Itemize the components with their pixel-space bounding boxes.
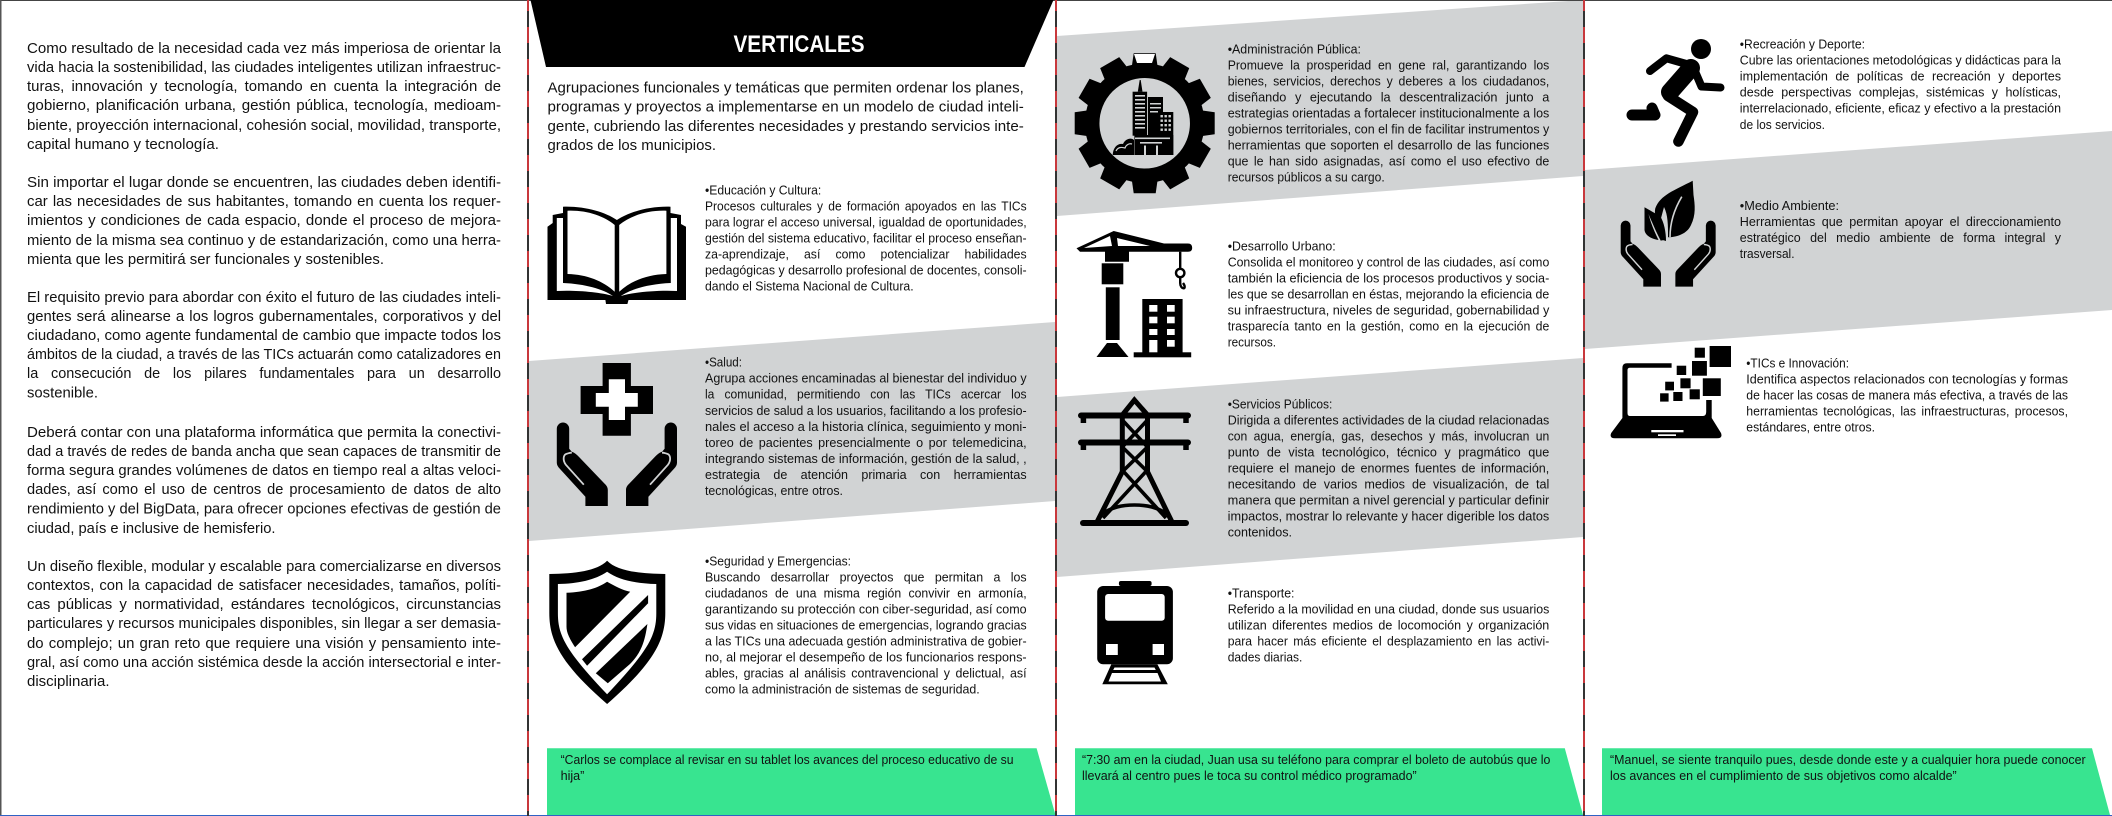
heading banner: VERTICALES: VERTICALES	[734, 31, 864, 58]
text block: Medio Ambiente: •Medio Ambiente:	[1740, 199, 1839, 213]
panel: intro text column: biente, proyección internacional, cohesión social, movilidad, transporte,	[27, 117, 501, 134]
panel: intro text column	[27, 40, 502, 690]
text block: Servicios Públicos: contenidos.	[1228, 525, 1292, 539]
callout: Carlos quote: “Carlos se complace al revisar en su tablet los avances del proceso educativo de su	[561, 753, 1014, 767]
text block: Recreación y Deporte	[1740, 38, 2061, 132]
panel: intro text column: capital humano y tecnología.	[27, 136, 219, 153]
text block: Salud: tecnológicas, entre otros.	[705, 484, 843, 498]
text block: Salud: la comunidad, permitiendo con las TICs acercar los	[705, 388, 1027, 402]
text block: Recreación y Deporte: implementación de políticas de recreación y deportes	[1740, 70, 2061, 84]
text block: Educación y Cultura: Procesos culturales y de formación apoyados en las TICs	[705, 200, 1027, 214]
panel: intro text column: vida hacia la sostenibilidad, las ciudades inteligentes utilizan infraestruc-	[27, 59, 501, 76]
panel: intro text column: dades, así como el uso de centros de procesamiento de datos de alto	[27, 481, 501, 498]
text block: Salud: toreo de pacientes presencialmente o por telemedicina,	[705, 436, 1027, 450]
callout: Carlos quote: hija”	[561, 769, 584, 783]
panel: intro text column: ciudad, país e inclusive de hemisferio.	[27, 520, 276, 537]
text block: Seguridad y Emergencias: ables, gracias al análisis contravencional y delictual, así	[705, 667, 1027, 681]
text block: Educación y Cultura: pedagógicas y desarrollo profesional de docentes, consoli-	[705, 264, 1027, 278]
panel: intro text column: particulares y recursos municipales disponibles, sin llegar a ser demasia-	[27, 615, 501, 632]
text block: Educación y Cultura: za-aprendizaje, así como potencializar habilidades	[705, 248, 1027, 262]
icon: gear with city buildings	[1075, 53, 1215, 193]
text block: Seguridad y Emergencias: a las TICs una adecuada gestión administrativa de gobier-	[705, 635, 1027, 649]
callout: Juan quote: llevará al centro pues le toca su control médico programado”	[1082, 769, 1417, 783]
icon: shield	[549, 561, 665, 704]
panel: intro text column: El requisito previo para abordar con éxito el futuro de las ciudades inteli-	[27, 289, 501, 306]
icon: running person	[1632, 39, 1720, 142]
text block: Seguridad y Emergencias: no, al mejorar el desempeño de los funcionarios respons-	[705, 651, 1027, 665]
text block: Servicios Públicos: punto de vista tecnológico, técnico y pragmático que	[1228, 445, 1549, 459]
icon: hands holding medical cross	[557, 363, 677, 506]
text block: Transporte: para hacer más eficiente el desplazamiento en las activi-	[1228, 634, 1549, 648]
gray band: Medio Ambiente	[1585, 131, 2112, 349]
panel: intro text column: contextos, con la capacidad de satisfacer necesidades, tamaños, políti-	[27, 577, 501, 594]
text block: Transporte: •Transporte:	[1228, 587, 1294, 601]
panel: intro text column: la consecución de los pilares fundamentales para un desarrollo	[27, 365, 501, 382]
callout: Manuel quote: los avances en el cumplimiento de sus objetivos como alcalde”	[1610, 769, 1957, 783]
panel: intro text column: rendimiento y del BigData, para ofrecer opciones efectivas de gestión de	[27, 500, 501, 518]
text block: Administración Pública	[1228, 42, 1550, 184]
text block: Administración Pública: Promueve la prosperidad en gene ral, garantizando los	[1228, 58, 1549, 72]
text block: TICs e Innovación	[1746, 357, 2068, 435]
text block: Administración Pública: recursos públicos a su cargo.	[1228, 170, 1385, 184]
text block: Salud: nales el acceso a la historia clínica, seguimiento y moni-	[705, 420, 1027, 434]
text block: Transporte: utilizan diferentes medios de locomoción y organización	[1228, 618, 1549, 632]
text block: Seguridad y Emergencias: como la administración de sistemas de seguridad.	[705, 683, 980, 697]
text block: Administración Pública: bienes, servicios, derechos y deberes a los ciudadanos,	[1228, 74, 1549, 88]
text block: Salud: Agrupa acciones encaminadas al bienestar del individuo y	[705, 372, 1027, 386]
text block: Servicios Públicos: Dirigida a diferentes actividades de la ciudad relacionadas	[1228, 413, 1549, 427]
text block: Recreación y Deporte: de los servicios.	[1740, 118, 1825, 132]
text block: Desarrollo Urbano: trasparecía tanto en la gestión, como en la ejecución de	[1228, 320, 1549, 334]
gray band: Servicios Públicos	[1057, 358, 1583, 577]
callout: Manuel quote	[1602, 748, 2110, 815]
text block: Transporte: dades diarias.	[1228, 650, 1302, 664]
intro paragraph: Agrupaciones funcionales: gente, cubriendo las diferentes necesidades y prestando servicios inte-	[548, 118, 1024, 135]
text block: TICs e Innovación: Identifica aspectos relacionados con tecnologías y formas	[1746, 373, 2068, 387]
text block: Administración Pública: diseñando y ejecutando la descentralización junto a	[1228, 90, 1549, 104]
text block: Recreación y Deporte: •Recreación y Deporte:	[1740, 38, 1865, 52]
icon: laptop with data squares	[1611, 346, 1731, 438]
panel: intro text column: sostenible.	[27, 384, 98, 402]
text block: Salud: estrategia de atención primaria con herramientas	[705, 468, 1027, 482]
heading banner: VERTICALES	[530, 0, 1054, 67]
text block: Administración Pública: •Administración Pública:	[1228, 42, 1361, 56]
intro paragraph: Agrupaciones funcionales	[548, 80, 1024, 154]
icon: open book	[548, 207, 686, 304]
text block: Medio Ambiente	[1740, 199, 2062, 261]
text block: Administración Pública: que le han sido asignadas, así como el uso efectivo de	[1228, 154, 1549, 168]
icon: hands holding leaves	[1621, 181, 1716, 287]
text block: Recreación y Deporte: Cubre las orientaciones metodológicas y didácticas para la	[1740, 54, 2061, 68]
text block: Administración Pública: gobiernos territoriales, con el fin de facilitar instrumentos y	[1228, 122, 1550, 136]
text block: Servicios Públicos: impactos, mostrar lo relevante y hacer digerible los datos	[1228, 509, 1549, 523]
text block: Medio Ambiente: estratégico del medio ambiente de forma integral y	[1740, 231, 2062, 245]
text block: Servicios Públicos: con agua, energía, gas, desechos y más, involucran un	[1228, 429, 1549, 443]
panel: intro text column: car las necesidades de sus habitantes, tomando en cuenta los requer-	[27, 193, 501, 210]
text block: Seguridad y Emergencias: ciudadanos de una misma región convivir en armonía,	[705, 587, 1027, 601]
gray band: Administración Pública	[1057, 0, 1583, 216]
text block: Desarrollo Urbano: también la eficiencia de los procesos productivos y socia-	[1228, 272, 1549, 286]
callout: Juan quote: “7:30 am en la ciudad, Juan usa su teléfono para comprar el boleto de autobús que lo	[1082, 753, 1550, 767]
intro paragraph: Agrupaciones funcionales: Agrupaciones funcionales y temáticas que permiten ordenar los planes,	[548, 80, 1024, 97]
text block: Administración Pública: estrategias orientadas a fortalecer institucionalmente a los	[1228, 106, 1549, 120]
text block: Administración Pública: herramientas que soporten el desarrollo de las funciones	[1228, 138, 1549, 152]
text block: Educación y Cultura: para lograr el acceso universal, igualdad de oportunidades,	[705, 216, 1027, 230]
text block: Seguridad y Emergencias: garantizando su protección con ciber-seguridad, así como	[705, 603, 1027, 617]
text block: Recreación y Deporte: desde perspectivas complejas, sistémicas y holísticas,	[1740, 86, 2061, 100]
panel: intro text column: mienta que les permitirá ser funcionales y sostenibles.	[27, 251, 384, 268]
text block: TICs e Innovación: estándares, entre otros.	[1746, 421, 1875, 435]
icon: electric transmission tower	[1081, 400, 1188, 523]
text block: Desarrollo Urbano: Consolida el monitoreo y control de las ciudades, así como	[1228, 256, 1549, 270]
intro paragraph: Agrupaciones funcionales: grados de los municipios.	[548, 137, 716, 154]
panel: intro text column: gral, así como una acción sistémica desde la acción intersectorial e inter-	[27, 654, 501, 671]
text block: TICs e Innovación: de hacer las cosas de manera más efectiva, a través de las	[1746, 389, 2068, 403]
text block: Salud: •Salud:	[705, 356, 742, 370]
intro paragraph: Agrupaciones funcionales: programas y proyectos a implementarse en un modelo de ciudad inteli-	[548, 99, 1024, 116]
text block: TICs e Innovación: •TICs e Innovación:	[1746, 357, 1849, 371]
text block: Salud	[705, 356, 1027, 498]
gray band: Salud	[529, 322, 1055, 541]
panel: intro text column: Como resultado de la necesidad cada vez más imperiosa de orientar la	[27, 40, 502, 57]
text block: Recreación y Deporte: interrelacionado, eficiente, eficaz y efectivo a la prestación	[1740, 102, 2061, 116]
icon: train	[1097, 581, 1173, 684]
text block: Educación y Cultura: gestión del sistema educativo, facilitar el proceso enseñan-	[705, 232, 1027, 246]
text block: Servicios Públicos: manera que permitan a nivel gerencial y particular definir	[1228, 493, 1549, 507]
text block: Servicios Públicos	[1228, 397, 1549, 539]
panel: intro text column: turas, innovación y tecnología, tomando en cuenta la integración de	[27, 78, 501, 95]
text block: Seguridad y Emergencias: Buscando desarrollar proyectos que permitan a los	[705, 571, 1027, 585]
panel: intro text column: Un diseño flexible, modular y escalable para comercializarse en diversos	[27, 558, 501, 575]
text block: Servicios Públicos: requiere el manejo de enormes fuentes de información,	[1228, 461, 1549, 475]
text block: Educación y Cultura	[705, 183, 1027, 294]
panel: intro text column: gentes será alinearse a los logros gubernamentales, corporativos y del	[27, 308, 501, 325]
text block: Transporte: Referido a la movilidad en una ciudad, donde sus usuarios	[1228, 602, 1549, 616]
panel: intro text column: do complejo; un gran reto que requiere una visión y pensamiento inte-	[27, 635, 501, 652]
text block: Salud: servicios de salud a los usuarios, facilitando a los profesio-	[705, 404, 1027, 418]
panel: intro text column: gobierno, planificación urbana, gestión pública, tecnología, medioam-	[27, 97, 501, 114]
text block: Transporte	[1228, 587, 1549, 664]
text block: Servicios Públicos: necesitando de varios medios de visualización, de tal	[1228, 477, 1549, 491]
text block: Servicios Públicos: •Servicios Públicos:	[1228, 397, 1332, 411]
panel: intro text column: forma segura grandes volúmenes de datos en tiempo real a altas veloci-	[27, 462, 501, 479]
text block: TICs e Innovación: herramientas tecnológicas, las infraestructuras, procesos,	[1746, 405, 2068, 419]
text block: Seguridad y Emergencias: •Seguridad y Emergencias:	[705, 555, 851, 569]
panel: intro text column: ciudadano, como agente fundamental de cambio que impacte todos los	[27, 327, 501, 344]
text block: Medio Ambiente: Herramientas que permitan apoyar el direccionamiento	[1740, 215, 2061, 229]
panel: intro text column: dad a través de redes de banda ancha que sean capaces de transmitir de	[27, 443, 501, 460]
icon: construction crane and building	[1076, 231, 1192, 357]
text block: Desarrollo Urbano	[1228, 240, 1550, 350]
panel: intro text column: miento de la misma sea continuo y de estandarización, como una herra-	[27, 232, 501, 249]
text block: Educación y Cultura: •Educación y Cultura:	[705, 183, 821, 197]
text block: Educación y Cultura: dando el Sistema Nacional de Cultura.	[705, 280, 914, 294]
panel: intro text column: ámbitos de la ciudad, a través de las TICs actuarán como catalizadores en	[27, 346, 501, 363]
text block: Desarrollo Urbano: •Desarrollo Urbano:	[1228, 240, 1336, 254]
text block: Seguridad y Emergencias	[705, 555, 1027, 697]
callout: Manuel quote: “Manuel, se siente tranquilo pues, desde donde este y a cualquier hora puede conocer	[1610, 753, 2086, 767]
panel: intro text column: disciplinaria.	[27, 673, 110, 690]
callout: Carlos quote	[547, 748, 1056, 815]
panel: intro text column: Sin importar el lugar donde se encuentren, las ciudades deben identifi-	[27, 174, 501, 191]
callout: Juan quote	[1075, 748, 1583, 815]
panel: intro text column: Deberá contar con una plataforma informática que permita la conectivi-	[27, 424, 501, 441]
text block: Seguridad y Emergencias: sus vidas en situaciones de emergencias, logrando gracias	[705, 619, 1027, 633]
panel: intro text column: imientos y condiciones de cada espacio, donde el proceso de mejora-	[27, 212, 501, 229]
text block: Desarrollo Urbano: recursos.	[1228, 336, 1276, 350]
text block: Medio Ambiente: trasversal.	[1740, 247, 1794, 261]
panel: intro text column: cas públicas y normatividad, estándares tecnológicos, circunstancias	[27, 596, 501, 613]
text block: Desarrollo Urbano: su infraestructura, niveles de seguridad, gobernabilidad y	[1228, 304, 1550, 318]
text block: Desarrollo Urbano: les que se desarrollan en éstas, mejorando la eficiencia de	[1228, 288, 1549, 302]
text block: Salud: integrando sistemas de información, gestión de la salud, ,	[705, 452, 1027, 466]
